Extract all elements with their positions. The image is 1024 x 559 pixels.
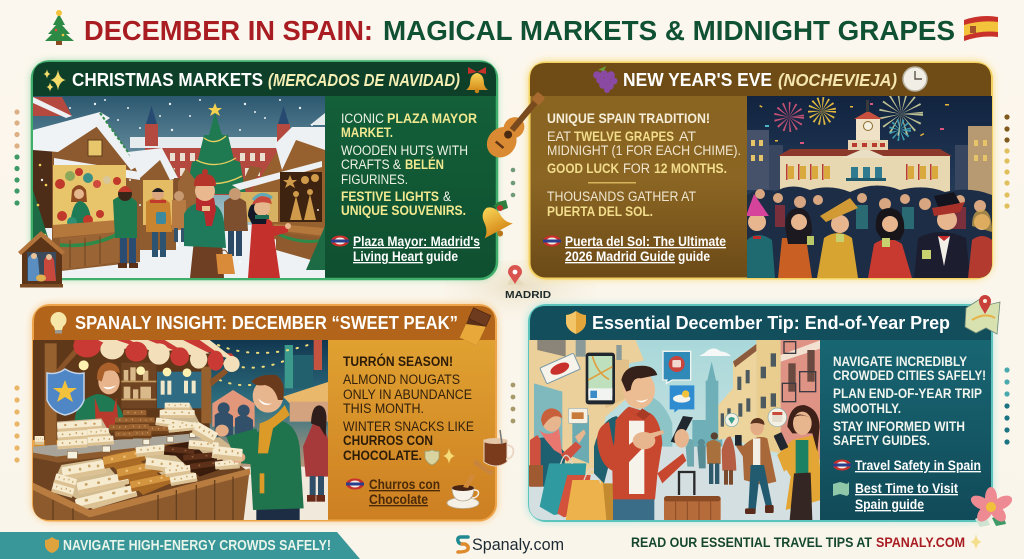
text block: grape tradition: TWELVE GRAPES (574, 129, 674, 145)
bulbs (79, 360, 191, 377)
text block: turron season: CHURROS CON (343, 433, 433, 449)
header: end-of-year prep: Essential December Tip: End-of-Year Prep (592, 312, 950, 333)
header: New Year's Eve: (NOCHEVIEJA) (778, 70, 897, 90)
link: Puerta del Sol guide: Puerta del Sol: The Ultimate (565, 234, 726, 249)
suitcase (664, 472, 721, 523)
palace backdrop (33, 97, 325, 195)
Casa de Correos building (778, 100, 952, 197)
link: Plaza Mayor guide: Plaza Mayor: Madrid's (353, 234, 480, 249)
footer banner: crowds (0, 532, 360, 559)
title: MAGICAL MARKETS & MIDNIGHT GRAPES (383, 15, 955, 46)
shoppers (113, 169, 291, 278)
shopkeeper (75, 362, 123, 430)
traveller man in red jacket (594, 366, 693, 520)
footer call to action: READ OUR ESSENTIAL TRAVEL TIPS AT (631, 535, 873, 550)
text block: turron season: ONLY IN ABUNDANCE (343, 387, 472, 403)
text block: market details: BELÉN (405, 156, 444, 173)
shopper: woman in red coat (248, 194, 291, 278)
link: churros con chocolate (346, 477, 440, 507)
icon: chocolate bar (460, 308, 491, 346)
text block: turron season: WINTER SNACKS LIKE (343, 419, 474, 435)
footer call to action: SPANALY.COM (876, 535, 965, 550)
bubble: bus (663, 351, 691, 383)
map of Spain backdrop with Madrid pin (442, 260, 598, 324)
icon: guitar (481, 86, 552, 164)
nougat blocks on counter (51, 437, 243, 511)
left edge fir with lights (33, 150, 52, 238)
icon: sparkles (43, 69, 66, 92)
background crowd (747, 185, 992, 278)
icon: shield (45, 537, 59, 553)
confetti (759, 103, 949, 144)
customer with scarf (191, 375, 304, 520)
icon: star shield (47, 369, 84, 415)
link: travel safety: Travel Safety in Spain (855, 458, 981, 473)
illustration: turron stall (33, 337, 329, 520)
stall posts (44, 343, 57, 462)
price tags (67, 433, 196, 459)
text block: grape tradition (547, 111, 741, 220)
text block: market details: FIGURINES. (341, 172, 408, 188)
header: Christmas markets: CHRISTMAS MARKETS (72, 69, 263, 90)
text block: turron season: THIS MONTH. (343, 401, 424, 417)
icon: shield (566, 311, 586, 334)
bubble: weather (670, 385, 694, 413)
illustration: Christmas market stalls (33, 96, 325, 278)
icon: metro sign (346, 478, 364, 490)
shopper: green jacket back view (113, 186, 138, 268)
text block: grape tradition: EAT (547, 129, 571, 145)
link: Plaza Mayor guide (331, 234, 480, 264)
header: end-of-year prep (530, 306, 991, 340)
text block: safety tips (833, 354, 986, 449)
upper shelf (33, 433, 205, 457)
fireworks (782, 103, 912, 136)
jacket (612, 407, 662, 499)
text block: grape tradition: THOUSANDS GATHER AT (547, 189, 696, 205)
shopper: grey brown rear (172, 191, 186, 242)
text block: safety tips: CROWDED CITIES SAFELY! (833, 368, 986, 384)
woman in red coat (303, 405, 328, 502)
icon: pink flower (968, 487, 1015, 527)
text block: grape tradition: MIDNIGHT (1 FOR EACH CHIME). (547, 143, 741, 159)
text block: grape tradition: UNIQUE SPAIN TRADITION! (547, 111, 710, 127)
left buildings (529, 340, 644, 487)
icon: light bulb (50, 312, 66, 334)
sky (529, 340, 821, 520)
icon: metro sign (833, 460, 851, 470)
bubble: calendar (768, 408, 787, 427)
icon: sparkle (970, 534, 982, 550)
header: New Year's Eve: NEW YEAR'S EVE (623, 69, 772, 90)
shopper: main man in red hat (184, 169, 235, 278)
illustration: traveller on crowded street (529, 340, 821, 523)
panel: Essential December tip (527, 304, 993, 523)
wooden counter (33, 468, 250, 520)
text block: safety tips: SAFETY GUIDES. (833, 433, 930, 449)
woman in yellow coat (774, 405, 821, 520)
text block: market details: UNIQUE SOUVENIRS. (341, 203, 466, 219)
link: Puerta del Sol guide: guide (678, 249, 710, 264)
text block: market details: & (443, 189, 451, 205)
text block: safety tips: PLAN END-OF-YEAR TRIP (833, 386, 982, 402)
text block: grape tradition: 12 MONTHS. (654, 161, 727, 177)
text block: market details (341, 111, 477, 219)
right buildings (718, 340, 821, 460)
link: churros con chocolate: Churros con (369, 477, 440, 492)
icon: bell with bow (466, 67, 488, 93)
night sky and street (206, 340, 329, 473)
distant pedestrians (686, 432, 736, 485)
illustration: Puerta del Sol fireworks and crowd (746, 96, 992, 278)
partygoer: man in top hat and tuxedo (914, 192, 970, 278)
link: best time to visit (833, 481, 958, 512)
text block: grape tradition: AT (679, 129, 696, 145)
icon: Spanaly logo (458, 537, 468, 552)
left wooden hut (33, 112, 140, 272)
text block: market details: MARKET. (341, 125, 393, 141)
link: Puerta del Sol guide: 2026 Madrid Guide (565, 249, 675, 264)
phone with map (586, 353, 615, 404)
awning (73, 337, 240, 372)
icon: clock (903, 67, 927, 91)
link: Plaza Mayor guide: Living Heart (353, 249, 423, 264)
icon: grapes (593, 66, 618, 93)
jeans (613, 497, 654, 520)
text block: turron season (343, 352, 474, 465)
snowy ground (33, 225, 325, 278)
small hut (128, 148, 197, 250)
shopper woman (529, 408, 586, 487)
header: New Year's Eve (530, 63, 991, 96)
falling snow (41, 99, 319, 263)
icon: golden bell with holly (472, 200, 516, 244)
right arm with phone (657, 453, 686, 483)
person in brown coat (735, 418, 776, 514)
cloud (699, 348, 731, 356)
link: Puerta del Sol guide (543, 234, 726, 264)
link: churros con chocolate: Chocolate (369, 492, 428, 507)
map of Spain backdrop with Madrid pin: MADRID (505, 289, 551, 301)
title (45, 10, 998, 46)
decorative dots (14, 109, 20, 149)
icon: small map (833, 482, 849, 496)
footer banner: crowds: NAVIGATE HIGH-ENERGY CROWDS SAFELY! (63, 538, 331, 554)
shopper: orange coat (146, 188, 172, 257)
wall shelf with jars (121, 363, 156, 408)
partygoer: woman in orange dress (778, 208, 814, 278)
title: DECEMBER IN SPAIN: (84, 15, 373, 46)
ticket (540, 353, 580, 384)
nougat stacks on upper shelf (35, 403, 200, 449)
string lights (218, 343, 313, 385)
text block: turron season: ALMOND NOUGATS (343, 372, 460, 388)
text block: market details: WOODEN HUTS WITH (341, 143, 468, 159)
partygoer: woman in red dress (868, 208, 912, 278)
side buildings (747, 126, 992, 196)
partygoer: blond woman (968, 210, 992, 278)
right wooden hut (232, 127, 325, 270)
distant market awning and silhouettes (212, 382, 329, 438)
footer call to action (631, 534, 982, 550)
header: December sweet peak (34, 306, 495, 340)
text block: market details: CRAFTS & (341, 157, 401, 173)
chat bubble: shop (568, 408, 588, 423)
icon: small shield and sparkle (425, 448, 455, 465)
street ground (529, 447, 821, 520)
icon: metro sign (543, 236, 561, 246)
text block: grape tradition: PUERTA DEL SOL. (547, 204, 653, 220)
text block: safety tips: NAVIGATE INCREDIBLY (833, 354, 967, 370)
header: Christmas markets: (MERCADOS DE NAVIDAD) (268, 70, 460, 90)
lower case backing (33, 443, 246, 513)
icon: cup of chocolate with churro (447, 474, 479, 508)
panel: Spanaly insight (32, 304, 497, 521)
header: December sweet peak: SPANALY INSIGHT: DECEMBER “SWEET PEAK” (75, 312, 458, 333)
shopping bags (540, 455, 613, 520)
text block: turron season: CHOCOLATE. (343, 448, 422, 464)
link: best time to visit: Best Time to Visit (855, 481, 958, 496)
icon: folded map with pin (965, 295, 1000, 334)
partygoer: woman in yellow dress (817, 198, 858, 278)
text block: market details: ICONIC (341, 111, 384, 127)
text block: market details: FESTIVE LIGHTS (341, 189, 439, 205)
left arm pointing (597, 422, 642, 473)
link: best time to visit: Spain guide (855, 497, 924, 512)
stall interior wall (33, 340, 210, 440)
icon: hot chocolate and churros (473, 430, 513, 476)
chat bubbles (725, 413, 738, 427)
text block: safety tips: STAY INFORMED WITH (833, 419, 965, 435)
text block: market details: PLAZA MAYOR (387, 111, 477, 127)
icon: nativity hut (18, 231, 65, 288)
footer logo: Spanaly.com: Spanaly.com (472, 535, 564, 554)
panel: Christmas markets (31, 61, 497, 279)
link: Plaza Mayor guide: guide (426, 249, 458, 264)
backpack strap (594, 416, 621, 483)
head (623, 371, 655, 409)
text block: turron season: TURRÓN SEASON! (343, 352, 453, 370)
icon: christmas tree (45, 10, 74, 45)
panel: New Year's Eve (528, 61, 993, 279)
icon: metro sign (331, 236, 349, 246)
foreground partygoers (746, 192, 992, 278)
partygoer: man in pink hat (746, 194, 775, 278)
header: Christmas markets (33, 62, 496, 96)
icon: Spanish flag (964, 16, 998, 41)
distant tower and teal buildings (644, 362, 722, 450)
Christmas tree (186, 103, 246, 194)
shopper: brown jacket (224, 188, 248, 256)
text block: grape tradition: FOR (623, 161, 650, 177)
text block: safety tips: SMOOTHLY. (833, 401, 901, 417)
text block: grape tradition: GOOD LUCK (547, 161, 620, 177)
